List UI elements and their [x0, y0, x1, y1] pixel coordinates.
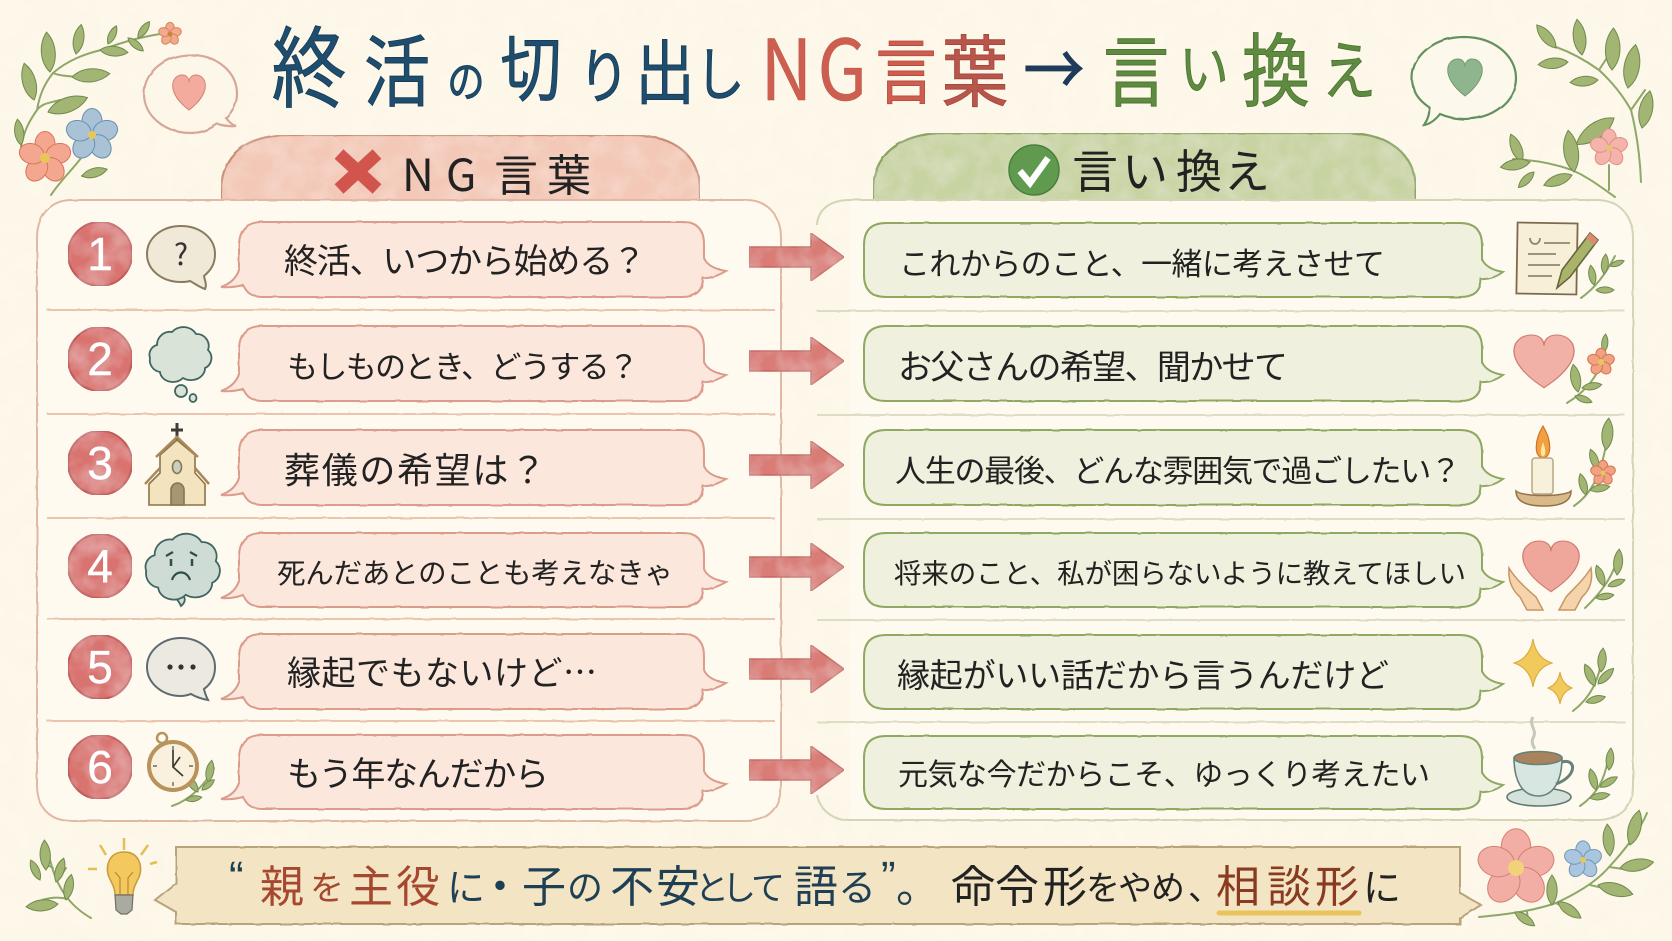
title: 切	[500, 13, 562, 117]
icon: heart held in hands	[1509, 541, 1626, 610]
number 4: 4	[87, 540, 113, 592]
number 2: 2	[87, 333, 113, 385]
number 5	[68, 635, 132, 699]
title: G	[818, 4, 867, 125]
takeaway text: をやめ、	[1086, 861, 1222, 910]
row 1	[68, 222, 1625, 298]
row 4	[68, 533, 1626, 610]
rephrase bubble 4	[864, 533, 1503, 607]
icon: light bulb	[88, 838, 157, 914]
title: し	[695, 28, 745, 112]
rephrase heading: い	[1122, 136, 1168, 202]
number 3	[68, 431, 132, 495]
takeaway text: 相談形	[1216, 851, 1359, 915]
icon: sad cloud	[146, 534, 220, 606]
takeaway text: ・子	[478, 851, 566, 915]
icon: pocket watch	[149, 733, 216, 806]
title: 葉	[942, 9, 1008, 123]
NG bubble 2: もしものとき、どうする？	[287, 342, 639, 387]
takeaway text: に	[447, 857, 485, 912]
takeaway text: ”	[881, 853, 896, 902]
NG heading: G	[446, 140, 476, 204]
title: の	[447, 46, 485, 110]
arrow 4	[749, 543, 844, 591]
NG bubble 5: 縁起でもないけど…	[287, 646, 597, 695]
row 2	[68, 326, 1616, 405]
panel: rephrase list frame	[817, 200, 1633, 820]
takeaway text: 。	[896, 851, 940, 915]
rephrase bubble 6: 元気な今だからこそ、ゆっくり考えたい	[898, 750, 1430, 794]
takeaway text: 主役	[349, 851, 440, 915]
title	[272, 0, 1376, 126]
title: 終	[272, 0, 346, 126]
row 5	[68, 634, 1616, 711]
NG bubble 6	[221, 735, 726, 809]
arrow 3	[749, 441, 844, 489]
title: 言	[1103, 9, 1169, 123]
panel: takeaway banner	[155, 847, 1481, 924]
rephrase bubble 6	[864, 736, 1503, 809]
rephrase heading: え	[1224, 136, 1270, 202]
icon: chapel	[145, 423, 209, 505]
NG heading: 葉	[547, 140, 591, 204]
NG bubble 4: 死んだあとのことも考えなきゃ	[277, 551, 673, 592]
panel: NG list frame	[37, 200, 781, 821]
icon: candle	[1516, 418, 1617, 506]
title: 活	[364, 9, 430, 123]
title: 出	[635, 17, 695, 118]
rephrase heading: 言	[1072, 136, 1118, 202]
takeaway text: を	[310, 861, 344, 910]
arrow 1	[749, 233, 844, 281]
takeaway text: として	[695, 861, 785, 910]
title: N	[761, 4, 812, 125]
NG bubble 3: 葬儀の希望は？	[284, 442, 546, 494]
decoration: top-right floral branch	[1500, 18, 1656, 197]
title: 換	[1242, 8, 1310, 124]
rephrase bubble 2: お父さんの希望、聞かせて	[898, 340, 1288, 389]
number 6	[68, 735, 132, 799]
NG bubble 4	[221, 533, 726, 607]
icon: thought cloud	[149, 327, 211, 402]
icon: sparkles	[1514, 639, 1616, 711]
NG heading: 言	[494, 140, 538, 204]
takeaway text: 語	[794, 851, 838, 915]
NG bubble 3	[221, 430, 726, 505]
number 4	[68, 534, 132, 598]
NG heading: N	[402, 140, 434, 204]
number 1: 1	[87, 228, 113, 280]
arrow 6	[749, 746, 844, 794]
rephrase heading: 換	[1176, 136, 1222, 202]
takeaway text: “	[229, 853, 244, 902]
rephrase bubble 5: 縁起がいい話だから言うんだけど	[897, 649, 1389, 697]
title: り	[579, 29, 630, 116]
title: 言	[875, 16, 937, 120]
icon: green check	[1009, 145, 1059, 195]
row 3	[68, 418, 1617, 506]
number 2	[68, 327, 132, 391]
title: え	[1322, 21, 1376, 113]
number 6: 6	[87, 741, 113, 793]
number 5: 5	[87, 641, 113, 693]
NG bubble 1: 終活、いつから始める？	[284, 234, 646, 283]
highlight underline	[1219, 910, 1359, 916]
number 1	[68, 222, 132, 286]
rephrase bubble 3: 人生の最後、どんな雰囲気で過ごしたい？	[895, 446, 1461, 491]
icon: red cross	[339, 154, 377, 189]
title: →	[1023, 14, 1085, 118]
takeaway text: る	[838, 857, 876, 912]
icon: heart and flower	[1514, 334, 1616, 405]
rephrase bubble 3	[864, 430, 1503, 505]
icon: left heart speech bubble	[144, 55, 237, 133]
rephrase bubble 2	[864, 326, 1503, 401]
arrow 5	[749, 645, 844, 693]
icon: question bubble	[147, 226, 215, 289]
takeaway text: 親	[260, 851, 304, 915]
icon: question bubble: ?	[174, 230, 188, 274]
icon: teacup	[1507, 717, 1619, 806]
rephrase bubble 1: これからのこと、一緒に考えさせて	[899, 239, 1385, 284]
NG bubble 2	[221, 326, 726, 401]
takeaway text: の	[567, 859, 603, 911]
panel: NG tab	[221, 135, 700, 204]
number 3: 3	[87, 437, 113, 489]
decoration: top-left floral branch	[13, 20, 182, 195]
icon: right heart speech bubble	[1412, 37, 1516, 125]
rephrase bubble 5	[864, 635, 1503, 709]
decoration: lower-right floral branch	[1474, 809, 1655, 929]
NG bubble 6: もう年なんだから	[287, 747, 549, 796]
takeaway text: 命令形	[951, 851, 1087, 915]
row 6	[68, 717, 1619, 809]
NG bubble 5	[221, 634, 726, 709]
NG bubble 1	[221, 222, 726, 297]
takeaway text: 不安	[610, 851, 700, 915]
decoration: lower-left sprig	[26, 840, 91, 918]
panel: rephrase tab	[873, 133, 1416, 202]
icon: ellipsis bubble	[147, 638, 215, 700]
icon: note and pencil	[1516, 222, 1625, 298]
arrow 2	[749, 337, 844, 385]
title: い	[1179, 23, 1229, 107]
rephrase bubble 4: 将来のこと、私が困らないように教えてほしい	[894, 551, 1466, 591]
takeaway text: に	[1363, 857, 1401, 912]
rephrase bubble 1	[864, 223, 1503, 297]
